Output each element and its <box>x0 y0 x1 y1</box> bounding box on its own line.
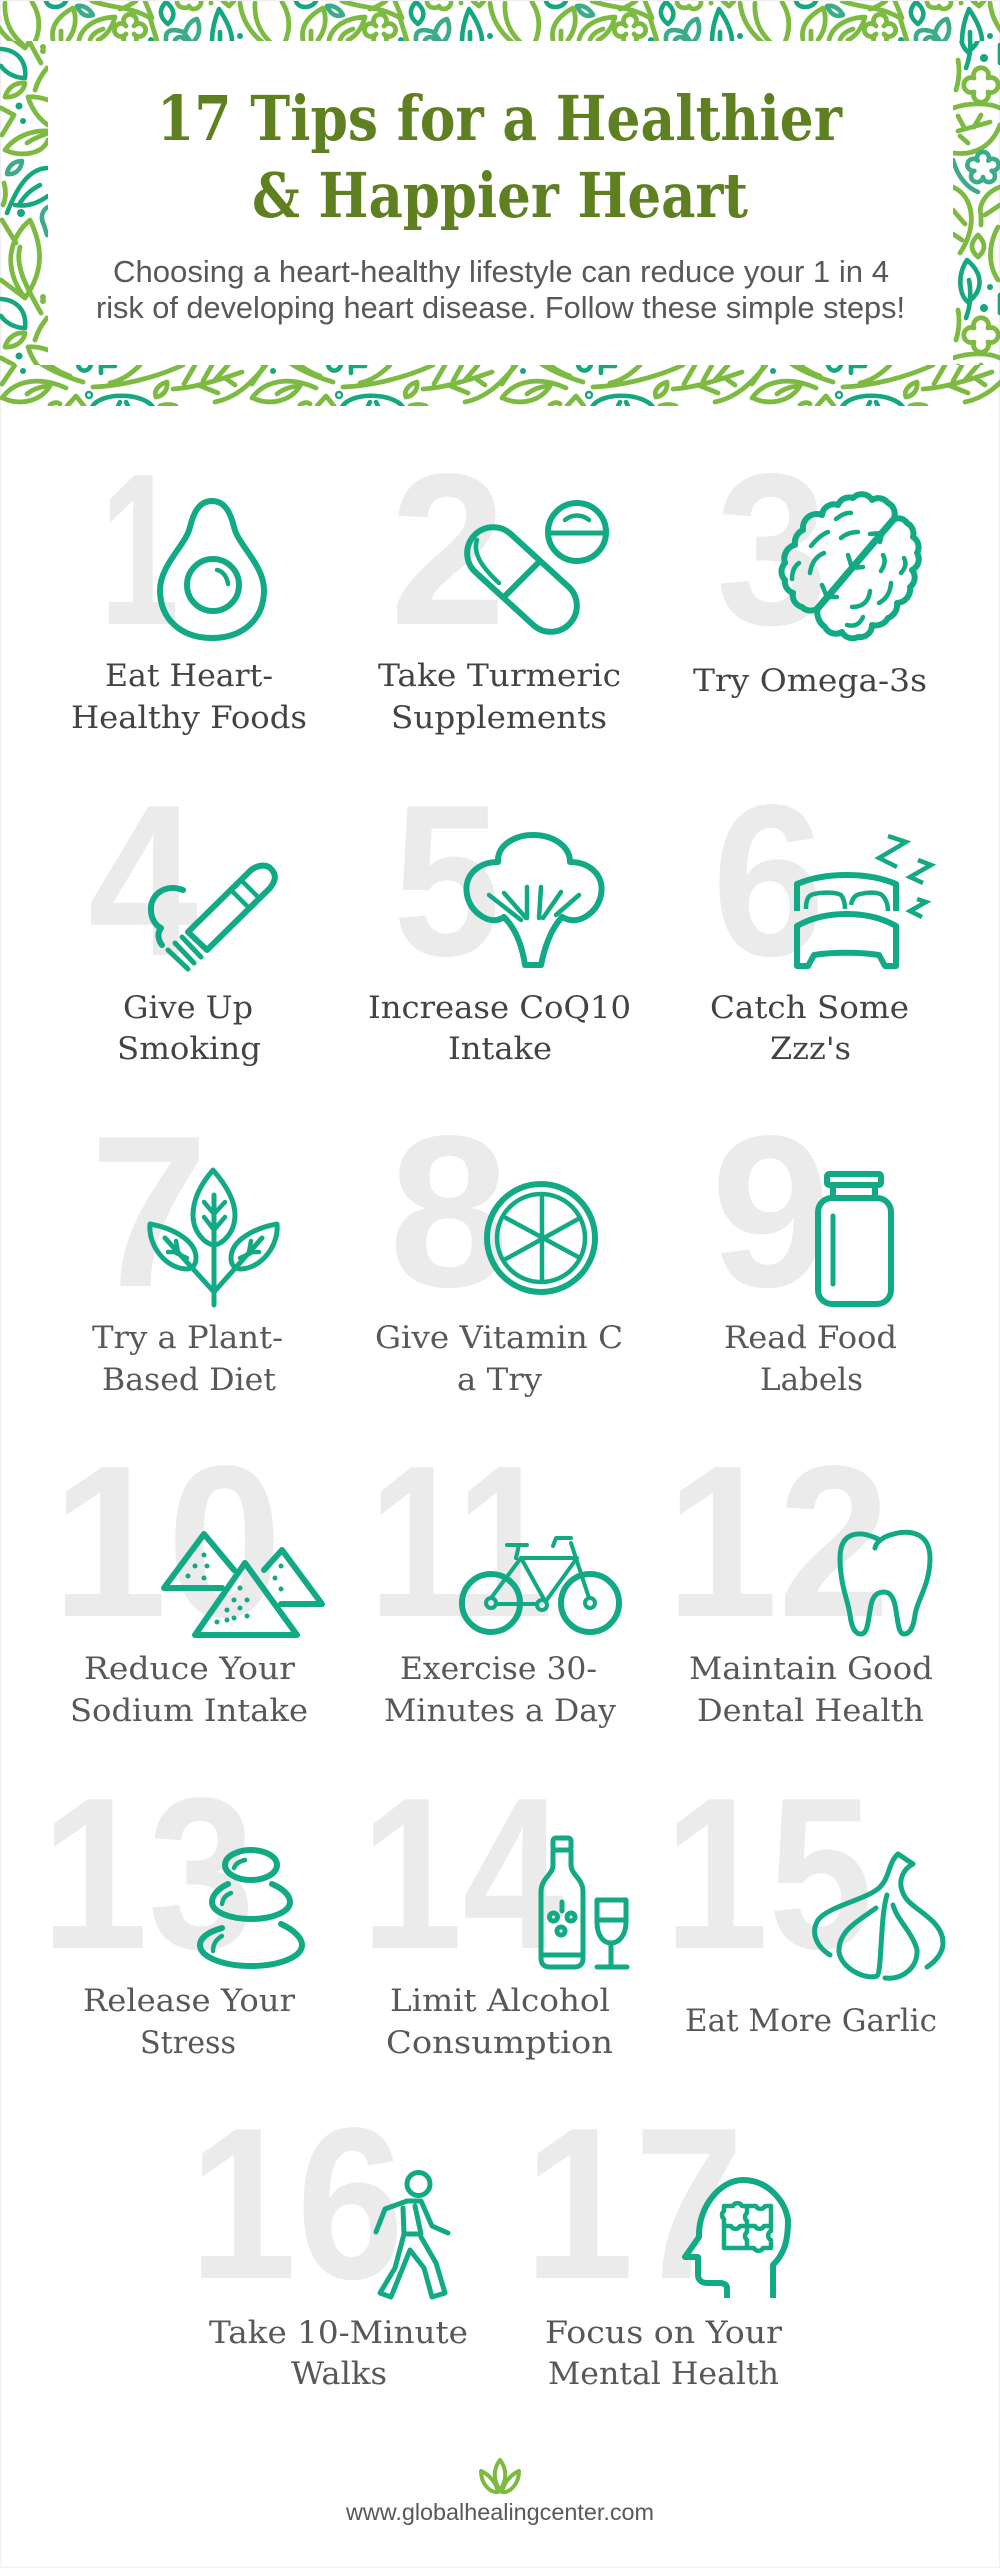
label: Take 10-Minute <box>209 2315 468 2351</box>
icon: garlic <box>815 1854 943 1978</box>
number 4: 4 <box>88 759 198 1001</box>
label: Sodium Intake <box>70 1693 308 1729</box>
icon: stacked stones <box>200 1850 302 1966</box>
label: Supplements <box>391 700 607 736</box>
label: a Try <box>457 1362 542 1398</box>
label: Healthy Foods <box>71 700 307 736</box>
label: Eat Heart- <box>105 658 273 694</box>
label: Read Food <box>724 1320 897 1356</box>
label: Walks <box>291 2356 387 2392</box>
label: Reduce Your <box>84 1651 295 1687</box>
label: Eat More Garlic <box>685 2003 937 2039</box>
number 9: 9 <box>711 1090 831 1332</box>
icon: citrus slice <box>487 1184 595 1292</box>
tip 17 <box>524 2082 788 2392</box>
number 15: 15 <box>664 1752 873 1994</box>
leaf pattern border <box>0 0 1000 568</box>
number 6: 6 <box>712 759 825 1001</box>
tip 8 <box>375 1090 623 1398</box>
icon: plant <box>150 1170 277 1305</box>
header panel with leaf pattern border <box>0 1 1000 406</box>
number 1: 1 <box>100 428 179 670</box>
tip 14 <box>361 1752 627 2061</box>
icon: avocado <box>160 501 264 638</box>
label: Minutes a Day <box>384 1693 616 1729</box>
icon: capsule and tablet <box>456 503 606 643</box>
number 2: 2 <box>390 428 506 670</box>
tip 6 <box>710 759 931 1067</box>
number 17: 17 <box>524 2082 744 2324</box>
label <box>368 990 631 1067</box>
number 12: 12 <box>666 1420 890 1662</box>
label <box>545 2315 782 2392</box>
tip 2 <box>378 428 621 736</box>
icon: broccoli <box>466 835 602 965</box>
tip 1 <box>71 428 307 736</box>
icon: brain <box>781 494 919 638</box>
tip 13 <box>41 1752 302 2061</box>
icon: bed with zzz <box>797 836 931 966</box>
label <box>209 2315 468 2392</box>
tip 16 <box>189 2082 468 2392</box>
icon: supplement bottle <box>818 1174 891 1304</box>
label: Zzz's <box>770 1031 851 1067</box>
label <box>92 1320 283 1398</box>
label <box>70 1651 308 1729</box>
label <box>71 658 307 736</box>
label <box>384 1651 616 1729</box>
number 3: 3 <box>716 428 828 670</box>
tip 15 <box>664 1752 943 2039</box>
label: Exercise 30- <box>400 1651 597 1687</box>
icon: head with puzzle <box>685 2180 788 2298</box>
label <box>378 658 621 736</box>
title: & Happier Heart <box>252 159 748 232</box>
label: Focus on Your <box>545 2315 782 2351</box>
label <box>710 990 909 1067</box>
number 11: 11 <box>369 1420 553 1662</box>
label <box>724 1320 897 1398</box>
label: Release Your <box>83 1983 295 2019</box>
label <box>375 1320 623 1398</box>
icon: salt piles <box>164 1534 322 1635</box>
label: Catch Some <box>710 990 909 1026</box>
label: Give Up <box>123 990 253 1026</box>
label <box>83 1983 295 2061</box>
tip 5 <box>368 759 631 1067</box>
label: Dental Health <box>697 1693 924 1729</box>
icon: cigarette <box>151 866 275 969</box>
label: Take Turmeric <box>378 658 621 694</box>
number 16: 16 <box>189 2082 404 2324</box>
label: Stress <box>140 2025 236 2061</box>
tip 11 <box>369 1420 619 1729</box>
number 7: 7 <box>90 1090 208 1332</box>
number 13: 13 <box>41 1752 255 1994</box>
logo icon: three leaves <box>481 2460 519 2492</box>
label: Maintain Good <box>689 1651 933 1687</box>
tip 12 <box>666 1420 933 1729</box>
website url: www.globalhealingcenter.com <box>345 2499 654 2525</box>
tip 9 <box>711 1090 897 1398</box>
label: Smoking <box>117 1031 261 1067</box>
label: Based Diet <box>102 1362 277 1398</box>
label: Give Vitamin C <box>375 1320 623 1356</box>
number 10: 10 <box>52 1420 282 1662</box>
label <box>117 990 261 1067</box>
icon: tooth <box>840 1532 930 1634</box>
title: 17 Tips for a Healthier <box>157 82 843 155</box>
label <box>689 1651 933 1729</box>
icon: bicycle <box>462 1538 619 1632</box>
label: Mental Health <box>548 2356 779 2392</box>
subtitle: risk of developing heart disease. Follow these simple steps! <box>96 290 905 325</box>
label: Try Omega-3s <box>693 663 927 699</box>
number 5: 5 <box>393 759 501 1001</box>
label: Consumption <box>386 2025 613 2061</box>
tip 4 <box>88 759 275 1067</box>
label: Labels <box>760 1362 863 1398</box>
tip 3 <box>693 428 927 699</box>
title <box>157 82 843 232</box>
label: Intake <box>448 1031 552 1067</box>
number 8: 8 <box>389 1090 509 1332</box>
label: Limit Alcohol <box>390 1983 610 2019</box>
subtitle <box>96 254 905 325</box>
subtitle: Choosing a heart-healthy lifestyle can reduce your 1 in 4 <box>113 254 889 289</box>
tip 7 <box>90 1090 283 1398</box>
label: Increase CoQ10 <box>368 990 631 1026</box>
icon: wine bottle and glass <box>541 1838 627 1967</box>
tip 10 <box>52 1420 322 1729</box>
icon: walking person <box>376 2172 448 2297</box>
label: Try a Plant- <box>92 1320 283 1356</box>
label <box>386 1983 613 2061</box>
number 14: 14 <box>361 1752 564 1994</box>
